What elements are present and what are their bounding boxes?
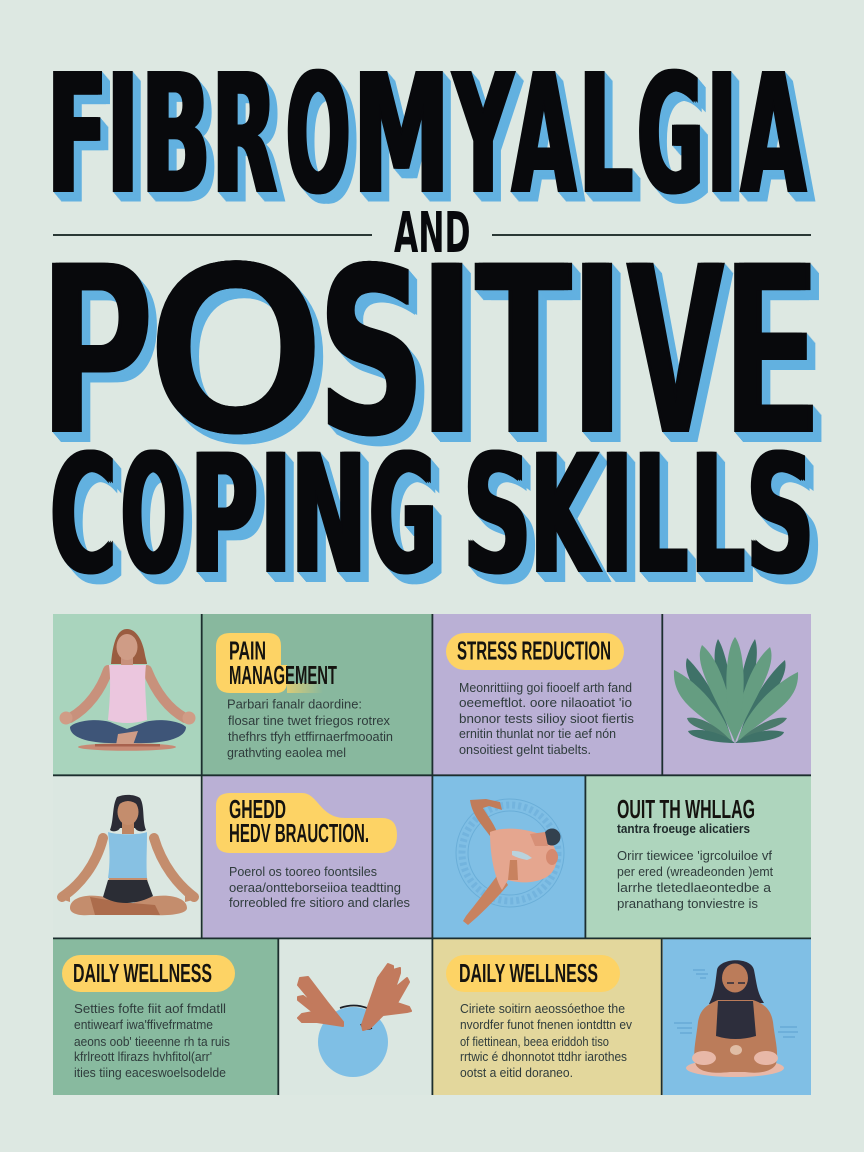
body text: pranathang tonviestre is: [617, 897, 758, 911]
body text: Orirr tiewicee 'igrcoluiloe vf: [617, 849, 773, 863]
panel: pain management: [202, 614, 432, 775]
panel: out in whllag: [586, 776, 811, 938]
title: FIBROMYALGIA: A: [741, 39, 805, 232]
icon: seated woman: [686, 960, 784, 1077]
title: FIBROMYALGIA: F: [47, 39, 107, 232]
body text: [74, 1002, 230, 1080]
title: COPING SKILLS: N: [291, 419, 366, 611]
title: FIBROMYALGIA: A: [512, 39, 575, 232]
body text: entiwearf iwa'ffivefrmatme: [74, 1018, 213, 1032]
body text: ernitin thunlat nor tie aef nón: [459, 727, 616, 741]
badge: daily wellness: DAILY WELLNESS: [73, 958, 212, 988]
body text: grathvting eaolea mel: [227, 746, 346, 760]
panel: stretching figure: [433, 776, 585, 938]
title: POSITIVE: V: [628, 210, 723, 485]
body text: [229, 865, 410, 910]
title: POSITIVE: P: [45, 210, 150, 485]
panel: meditating woman pink top: [53, 614, 201, 775]
body text: onsoitiest gelnt tiabelts.: [459, 743, 591, 757]
body text: Meonrittiing goi fiooelf arth fand: [459, 681, 632, 695]
title: FIBROMYALGIA: G: [636, 39, 703, 232]
body text: per ered (wreadeonden )emt: [617, 865, 773, 879]
grid lines: [53, 614, 811, 1095]
badge: daily wellness: [446, 955, 620, 992]
badge: GHEDD: [229, 794, 286, 824]
icon: woman in pink top: [60, 629, 196, 751]
body text: oeraa/ontteborseiioa teadtting: [229, 881, 401, 895]
body text: aeons oob' tieeenne rh ta ruis: [74, 1035, 230, 1049]
title: COPING SKILLS: G: [369, 419, 438, 611]
title: POSITIVE: T: [477, 210, 569, 485]
panel: meditating woman blue top: [53, 776, 201, 938]
body text: flosar tine twet friegos rotrex: [228, 714, 391, 728]
title: FIBROMYALGIA: B: [141, 39, 210, 232]
badge: [216, 793, 397, 853]
title: COPING SKILLS: S: [746, 419, 814, 611]
title: FIBROMYALGIA: L: [579, 39, 633, 232]
panel: seated woman on blue: [663, 939, 811, 1095]
title: COPING SKILLS: K: [530, 419, 598, 611]
title: AND: AND: [394, 201, 471, 266]
badge: daily wellness: DAILY WELLNESS: [459, 958, 598, 988]
subheading: tantra froeuge alicatiers: [617, 822, 750, 836]
title: POSITIVE: E: [731, 210, 813, 485]
title: POSITIVE: S: [317, 218, 426, 488]
icon: water ripples: [674, 970, 798, 1037]
icon: stretching figure: [463, 799, 560, 925]
title: COPING SKILLS: I: [601, 419, 633, 611]
body text: [617, 849, 773, 911]
panel: stress reduction: [433, 614, 662, 775]
panel: hands and ball: [279, 939, 432, 1095]
body text: forreobled fre sitioro and clarles: [229, 896, 410, 910]
body text: Poerol os tooreo foontsiles: [229, 865, 377, 879]
title: FIBROMYALGIA: M: [353, 39, 450, 232]
icon: woman in blue top: [58, 795, 197, 915]
body text: Parbari fanalr daordine:: [227, 698, 362, 712]
panel: daily wellness green: [53, 939, 278, 1095]
title: POSITIVE: I: [423, 210, 470, 485]
title: COPING SKILLS: [50, 419, 818, 611]
body text: Setties fofte fiit aof fmdatll: [74, 1002, 226, 1016]
title: FIBROMYALGIA: I: [107, 39, 139, 232]
body text: of fiettinean, beea eriddoh tiso: [460, 1035, 609, 1049]
body text: oeemeftlot. oore nilaoatiot 'io: [459, 696, 632, 710]
title: FIBROMYALGIA: R: [212, 39, 277, 232]
icon: patterned ring: [456, 799, 564, 907]
badge: pain management: [216, 633, 337, 693]
body text: bnonor tests silioy sioot fiertis: [459, 712, 634, 726]
body text: ities tiing eaceswoelsodelde: [74, 1066, 226, 1080]
body text: rrtwic é dhonnotot ttdhr iarothes: [460, 1050, 627, 1064]
title: COPING SKILLS: P: [190, 419, 258, 611]
title: COPING SKILLS: C: [50, 419, 117, 611]
divider rule right: [492, 234, 811, 236]
title: POSITIVE: [45, 210, 822, 488]
divider rule left: [53, 234, 372, 236]
body text: Ciriete soitirn aeossóethoe the: [460, 1002, 625, 1016]
title: COPING SKILLS: L: [634, 419, 688, 611]
title: POSITIVE: I: [574, 210, 620, 485]
body text: thefhrs tfyh etffirnaerfmooatin: [228, 730, 393, 744]
title: COPING SKILLS: S: [463, 419, 531, 611]
panel: shedd heavy braction: [203, 776, 432, 938]
body text: larrhe tletedlaeontedbe a: [617, 881, 771, 895]
heading: OUIT TH WHLLAG: [617, 794, 755, 824]
icon: black arc: [340, 1006, 372, 1029]
icon: right hand: [362, 964, 411, 1030]
body text: nvordfer funot fnenen iontdttn ev: [460, 1018, 633, 1032]
body text: [460, 1002, 633, 1080]
body text: kfrlreott lfirazs hvhfitol(arr': [74, 1050, 212, 1064]
title: POSITIVE: O: [148, 210, 324, 485]
badge: pain management: PAIN: [229, 636, 266, 666]
badge: HEDV BRAUCTION.: [229, 818, 369, 848]
icon: blue ball: [318, 1007, 388, 1077]
panel: plant illustration: [663, 614, 811, 775]
badge: pain management: MANAGEMENT: [229, 660, 337, 690]
body text: [227, 698, 393, 760]
body text: ootst a eitid doraneo.: [460, 1066, 573, 1080]
title: FIBROMYALGIA: I: [707, 39, 736, 232]
title: FIBROMYALGIA: [47, 39, 816, 232]
badge: daily wellness: [62, 955, 235, 992]
icon: plant: [674, 637, 798, 743]
title: FIBROMYALGIA: O: [286, 39, 350, 232]
badge: stress reduction: STRESS REDUCTION: [457, 636, 611, 666]
panel: daily wellness yellow: [433, 939, 661, 1095]
title: COPING SKILLS: O: [121, 419, 185, 611]
body text: [459, 681, 634, 757]
title: COPING SKILLS: L: [691, 419, 745, 611]
badge: stress reduction: [446, 633, 624, 670]
title: FIBROMYALGIA: Y: [452, 39, 513, 232]
title: COPING SKILLS: I: [261, 419, 290, 611]
icon: left hand: [298, 977, 343, 1026]
